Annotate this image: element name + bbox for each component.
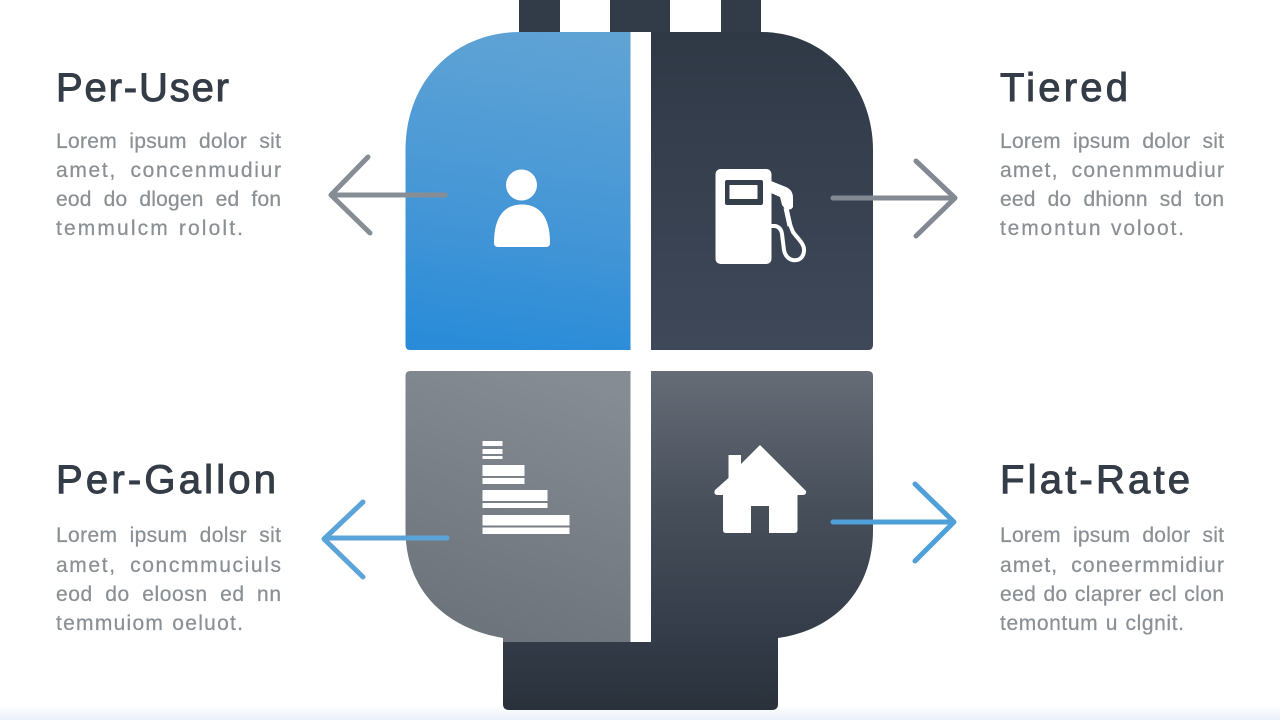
body: flat-rate: Lorem ipsum dolor sit (1000, 524, 1224, 547)
heading: per-gallon: Per-Gallon (56, 458, 276, 502)
text block: tiered (1000, 66, 1224, 240)
arrow: flat-rate (833, 484, 954, 561)
icon: house (714, 445, 806, 533)
body: per-user (56, 130, 281, 240)
body: per-gallon (56, 524, 281, 635)
text block: per-gallon (56, 458, 281, 635)
heading: flat-rate: Flat-Rate (1000, 458, 1190, 502)
body: flat-rate: eed do claprer ecl clon (1000, 583, 1224, 606)
body: per-gallon: Lorem ipsum dolsr sit (56, 524, 281, 547)
body: flat-rate (1000, 524, 1224, 635)
heading: tiered: Tiered (1000, 66, 1128, 110)
body: flat-rate: temontum u clgnit. (1000, 612, 1184, 635)
panel: flat-rate (651, 371, 873, 642)
panel: tiered (651, 32, 873, 350)
bottom glow (0, 706, 1280, 720)
body: flat-rate: amet, coneermmidiur (1000, 554, 1224, 577)
icon: user (494, 170, 550, 247)
icon: fuel pump (716, 169, 804, 264)
body: per-user: eod do dlogen ed fon (56, 188, 281, 211)
text block: per-user (56, 66, 281, 240)
body: tiered: temontun voloot. (1000, 217, 1184, 240)
panel: per-user (406, 32, 630, 350)
body: per-gallon: temmuiom oeluot. (56, 612, 243, 635)
body: per-user: temmulcm rololt. (56, 217, 243, 240)
body: tiered (1000, 130, 1224, 240)
icon: stepped bars (482, 441, 570, 534)
base block (503, 642, 778, 710)
top connector prongs (519, 0, 761, 32)
body: tiered: Lorem ipsum dolor sit (1000, 130, 1224, 153)
text block: flat-rate (1000, 458, 1224, 635)
panel: per-gallon (406, 371, 630, 642)
body: per-user: amet, concenmudiur (56, 159, 281, 182)
arrow: per-user (331, 157, 445, 233)
arrow: tiered (833, 161, 955, 236)
body: tiered: eed do dhionn sd ton (1000, 188, 1224, 211)
arrow: per-gallon (324, 502, 447, 577)
body: per-user: Lorem ipsum dolor sit (56, 130, 281, 153)
body: per-gallon: amet, concmmuciuls (56, 554, 281, 577)
heading: per-user: Per-User (56, 66, 229, 110)
body: tiered: amet, conenmmudiur (1000, 159, 1224, 182)
body: per-gallon: eod do eloosn ed nn (56, 583, 281, 606)
